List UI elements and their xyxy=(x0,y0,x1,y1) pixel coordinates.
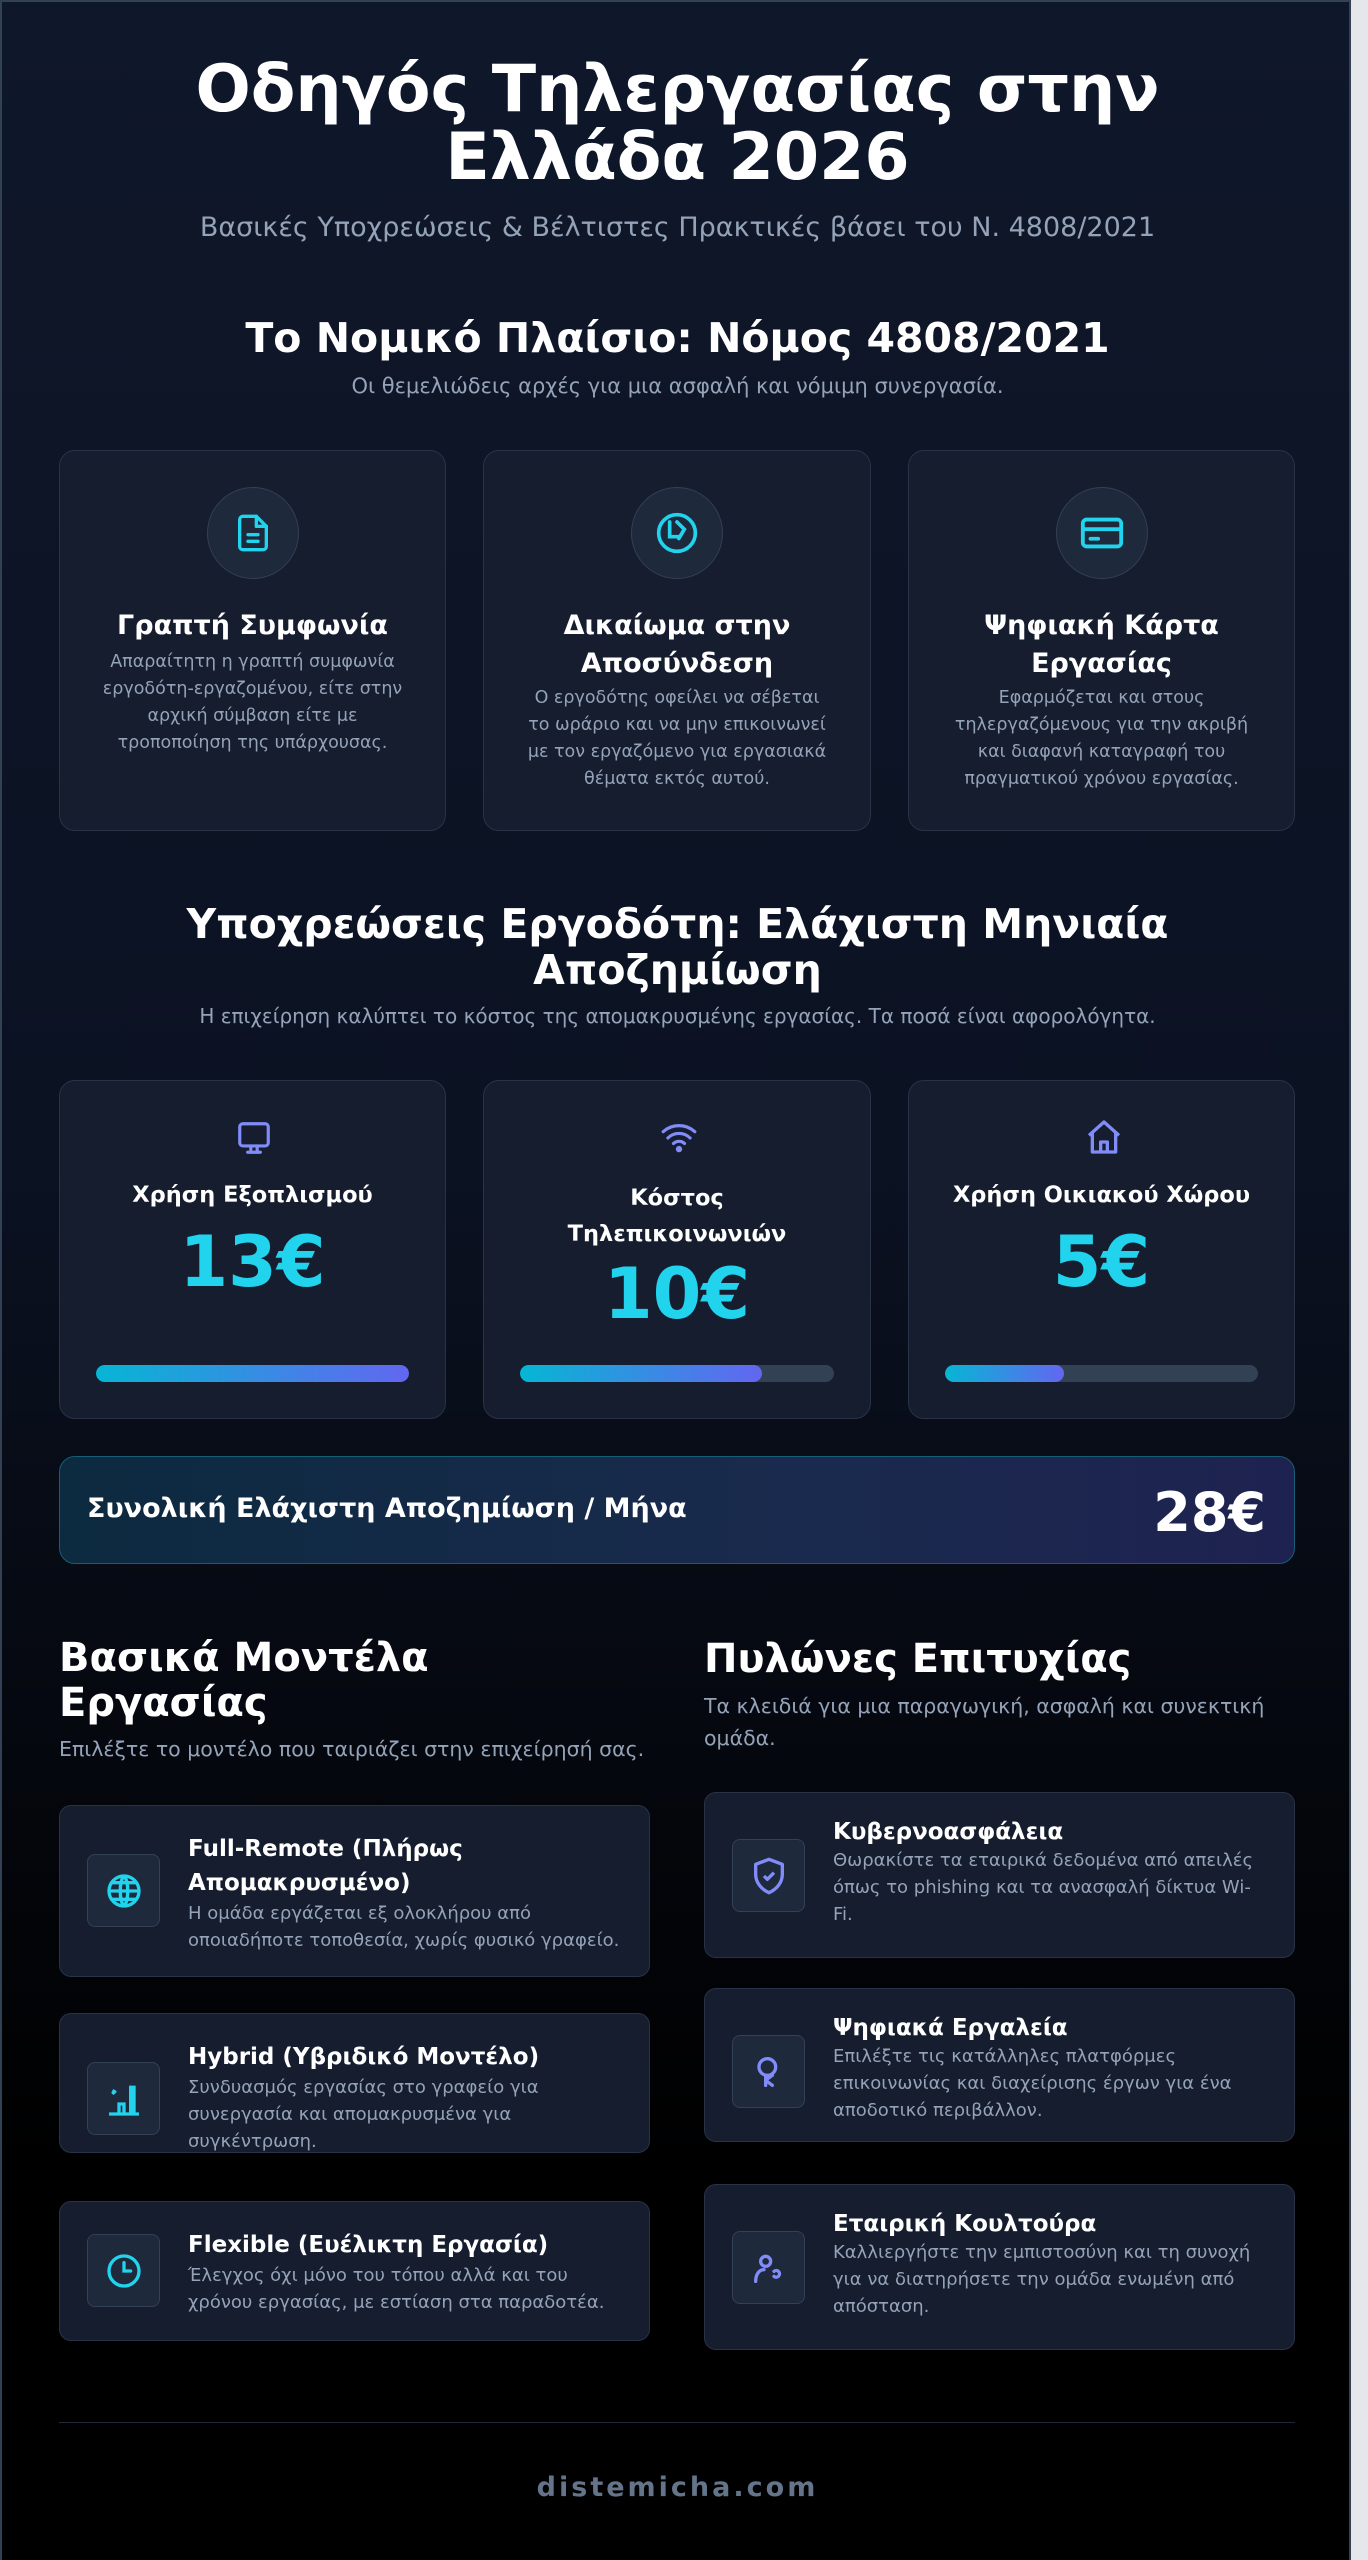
card text: Ο εργοδότης οφείλει να σέβεται το ωράριο και να μην επικοινωνεί με τον εργαζόμενο για εργασιακά θέματα εκτός αυτού. xyxy=(528,688,826,789)
card text: Απαραίτητη η γραπτή συμφωνία εργοδότη-εργαζομένου, είτε στην αρχική σύμβαση είτε με τροποποίηση της υπάρχουσας. xyxy=(103,652,402,753)
section heading: employer obligations: Υποχρεώσεις Εργοδότη: Ελάχιστη Μηνιαία xyxy=(187,900,1168,948)
panel: telecom cost xyxy=(483,1080,871,1419)
icon: wifi xyxy=(662,1124,696,1152)
card text: Εφαρμόζεται και στους τηλεργαζόμενους για την ακριβή και διαφανή καταγραφή του πραγματικού χρόνου εργασίας. xyxy=(955,688,1248,789)
icon: house xyxy=(1088,1120,1120,1154)
section subtitle: Η επιχείρηση καλύπτει το κόστος της απομακρυσμένης εργασίας. Τα ποσά είναι αφορολόγητα. xyxy=(199,1004,1156,1028)
icon: shield xyxy=(732,1839,805,1912)
card title xyxy=(564,610,790,679)
pillar text: Ψηφιακά Εργαλεία xyxy=(833,2015,1068,2041)
pillar text: Εταιρική Κουλτούρα xyxy=(833,2211,1096,2237)
panel: right to disconnect xyxy=(483,450,871,831)
value: 10€ xyxy=(604,1253,750,1335)
subtitle: Βασικές Υποχρεώσεις & Βέλτιστες Πρακτικές βάσει του Ν. 4808/2021 xyxy=(200,212,1155,243)
title xyxy=(195,52,1160,195)
total callout xyxy=(59,1456,1295,1564)
panel: home space cost xyxy=(908,1080,1295,1419)
icon: card xyxy=(1056,487,1148,579)
icon: clock xyxy=(87,2234,160,2307)
panel: written agreement xyxy=(59,450,446,831)
panel: digital tools xyxy=(704,1988,1295,2142)
pillar text: Θωρακίστε τα εταιρικά δεδομένα από απειλές όπως το phishing και τα ανασφαλή δίκτυα Wi-Fi. xyxy=(833,1850,1253,1925)
panel: equipment cost xyxy=(59,1080,446,1419)
value: 13€ xyxy=(179,1221,326,1303)
card title: Χρήση Οικιακού Χώρου xyxy=(953,1182,1250,1208)
section heading: employer obligations: Αποζημίωση xyxy=(533,946,822,994)
value: 5€ xyxy=(1053,1221,1150,1303)
total label: Συνολική Ελάχιστη Αποζημίωση / Μήνα xyxy=(87,1493,687,1524)
card title: Κόστος xyxy=(630,1185,724,1211)
section heading: work models xyxy=(59,1635,429,1726)
icon: chart xyxy=(87,2062,160,2135)
section heading: legal framework: Το Νομικό Πλαίσιο: Νόμος 4808/2021 xyxy=(245,314,1110,362)
model text xyxy=(188,1836,619,1951)
progress bar xyxy=(96,1365,409,1382)
panel: cybersecurity xyxy=(704,1792,1295,1958)
model text: Συνδυασμός εργασίας στο γραφείο για συνεργασία και απομακρυσμένα για συγκέντρωση. xyxy=(188,2077,539,2152)
card title xyxy=(984,610,1219,679)
icon: document xyxy=(206,487,298,579)
panel: hybrid xyxy=(59,2013,650,2153)
panel: company culture xyxy=(704,2184,1295,2350)
section subtitle: Τα κλειδιά για μια παραγωγική, ασφαλή και συνεκτική ομάδα. xyxy=(704,1694,1264,1750)
model text xyxy=(188,2232,604,2313)
icon: globe xyxy=(87,1854,160,1927)
card title: Δικαίωμα στην xyxy=(564,610,790,641)
icon: tools xyxy=(732,2035,805,2108)
card title: Τηλεπικοινωνιών xyxy=(568,1221,786,1247)
total value: 28€ xyxy=(1153,1481,1266,1544)
model text xyxy=(188,2044,539,2152)
card title: Γραπτή Συμφωνία xyxy=(117,610,388,641)
model text: Έλεγχος όχι μόνο του τόπου αλλά και του χρόνου εργασίας, με εστίαση στα παραδοτέα. xyxy=(188,2265,604,2313)
model text: Hybrid (Υβριδικό Μοντέλο) xyxy=(188,2044,539,2070)
pillar text: Καλλιεργήστε την εμπιστοσύνη και τη συνοχή για να διατηρήσετε την ομάδα ενωμένη από απόσταση. xyxy=(833,2242,1250,2317)
pillar text: Κυβερνοασφάλεια xyxy=(833,1819,1063,1845)
progress bar xyxy=(520,1365,834,1382)
title: Οδηγός Τηλεργασίας στην xyxy=(195,52,1160,127)
section subtitle: Οι θεμελιώδεις αρχές για μια ασφαλή και νόμιμη συνεργασία. xyxy=(351,374,1004,398)
section heading: work models: Εργασίας xyxy=(59,1680,268,1726)
model text: Full-Remote (Πλήρως xyxy=(188,1836,463,1862)
icon: disconnect xyxy=(631,487,723,579)
title: Ελλάδα 2026 xyxy=(445,120,910,195)
section heading: work models: Βασικά Μοντέλα xyxy=(59,1635,429,1681)
card title: Αποσύνδεση xyxy=(581,648,773,679)
card title: Εργασίας xyxy=(1031,648,1172,679)
panel: flexible xyxy=(59,2201,650,2341)
model text: Απομακρυσμένο) xyxy=(188,1870,410,1896)
model text: Flexible (Ευέλικτη Εργασία) xyxy=(188,2232,548,2258)
section heading: pillars: Πυλώνες Επιτυχίας xyxy=(704,1636,1131,1682)
panel: full remote xyxy=(59,1805,650,1977)
icon: person xyxy=(732,2231,805,2304)
card title xyxy=(568,1185,786,1247)
panel: digital work card xyxy=(908,450,1295,831)
pillar text: Επιλέξτε τις κατάλληλες πλατφόρμες επικοινωνίας και διαχείρισης έργων για ένα αποδοτικό περιβάλλον. xyxy=(833,2046,1232,2121)
model text: Η ομάδα εργάζεται εξ ολοκλήρου από οποιαδήποτε τοποθεσία, χωρίς φυσικό γραφείο. xyxy=(188,1903,619,1951)
icon: monitor xyxy=(238,1122,270,1154)
card title: Ψηφιακή Κάρτα xyxy=(984,610,1219,641)
progress bar xyxy=(945,1365,1258,1382)
section heading: employer obligations xyxy=(186,900,1168,994)
footer: distemicha.com xyxy=(537,2472,818,2503)
card title: Χρήση Εξοπλισμού xyxy=(132,1182,373,1208)
section subtitle: Επιλέξτε το μοντέλο που ταιριάζει στην επιχείρησή σας. xyxy=(59,1737,644,1761)
